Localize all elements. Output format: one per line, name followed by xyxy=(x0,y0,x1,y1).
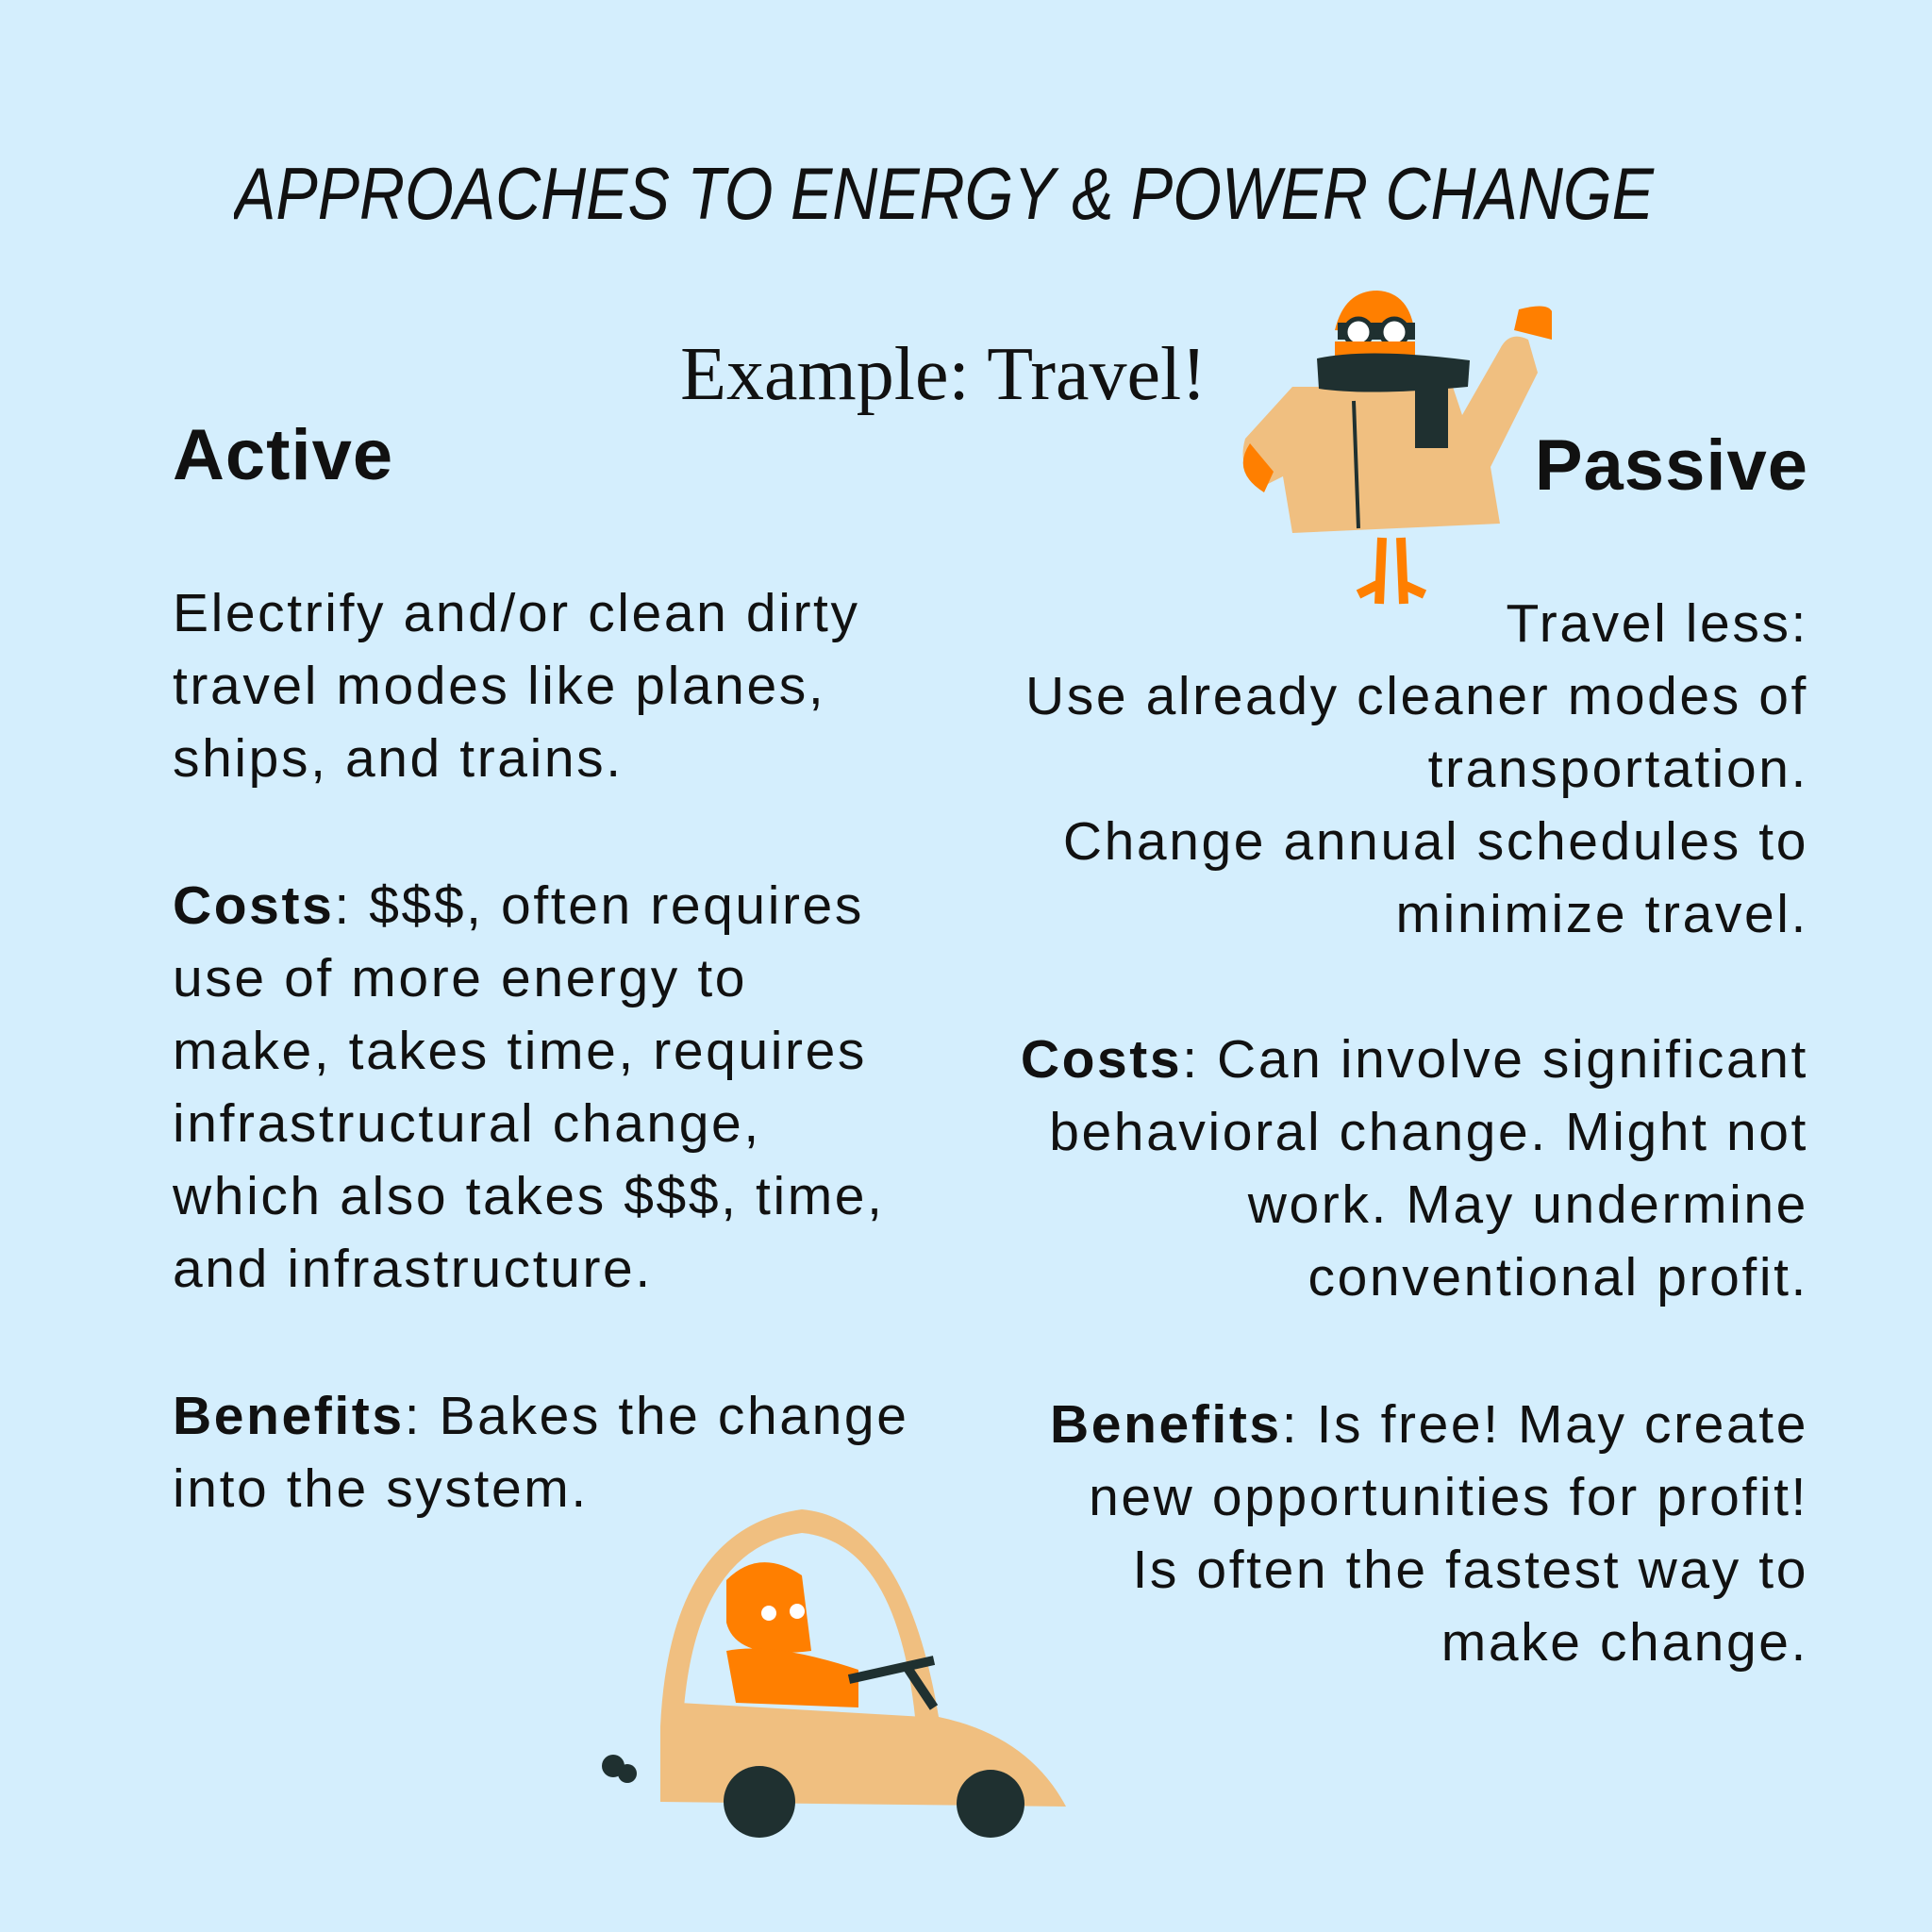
icon: owl waving xyxy=(1243,291,1552,604)
passive costs: conventional profit. xyxy=(1308,1247,1808,1307)
passive benefits: Benefits: Is free! May create xyxy=(1050,1394,1808,1455)
passive benefits xyxy=(1050,1394,1808,1673)
active description xyxy=(173,583,860,789)
icon: owl driving car xyxy=(602,1509,1066,1838)
active costs: use of more energy to xyxy=(173,948,747,1008)
heading: passive: Passive xyxy=(1535,425,1808,506)
active costs: make, takes time, requires xyxy=(173,1021,867,1081)
passive description: minimize travel. xyxy=(1395,884,1808,944)
active description: Electrify and/or clean dirty xyxy=(173,583,860,643)
passive description: Use already cleaner modes of xyxy=(1025,666,1808,726)
active costs: which also takes $$$, time, xyxy=(173,1166,885,1226)
active description: travel modes like planes, xyxy=(173,656,825,716)
passive benefits: make change. xyxy=(1441,1612,1808,1673)
passive description xyxy=(1025,593,1808,944)
active costs: infrastructural change, xyxy=(173,1093,761,1154)
active benefits: Benefits: Bakes the change xyxy=(173,1386,909,1446)
passive description: transportation. xyxy=(1428,739,1808,799)
heading: active: Active xyxy=(173,415,393,495)
active benefits xyxy=(173,1386,909,1519)
active description: ships, and trains. xyxy=(173,728,624,789)
passive description: Change annual schedules to xyxy=(1063,811,1808,872)
passive costs: work. May undermine xyxy=(1248,1174,1808,1235)
active costs: and infrastructure. xyxy=(173,1239,653,1299)
passive costs: Costs: Can involve significant xyxy=(1021,1029,1808,1090)
passive benefits: new opportunities for profit! xyxy=(1089,1467,1808,1527)
active benefits: into the system. xyxy=(173,1458,589,1519)
active costs: Costs: $$$, often requires xyxy=(173,875,864,936)
subtitle: Example: Travel! xyxy=(680,333,1207,416)
passive benefits: Is often the fastest way to xyxy=(1132,1540,1808,1600)
active costs xyxy=(172,875,885,1299)
passive description: Travel less: xyxy=(1506,593,1808,654)
passive costs xyxy=(1021,1029,1808,1307)
passive costs: behavioral change. Might not xyxy=(1049,1102,1808,1162)
